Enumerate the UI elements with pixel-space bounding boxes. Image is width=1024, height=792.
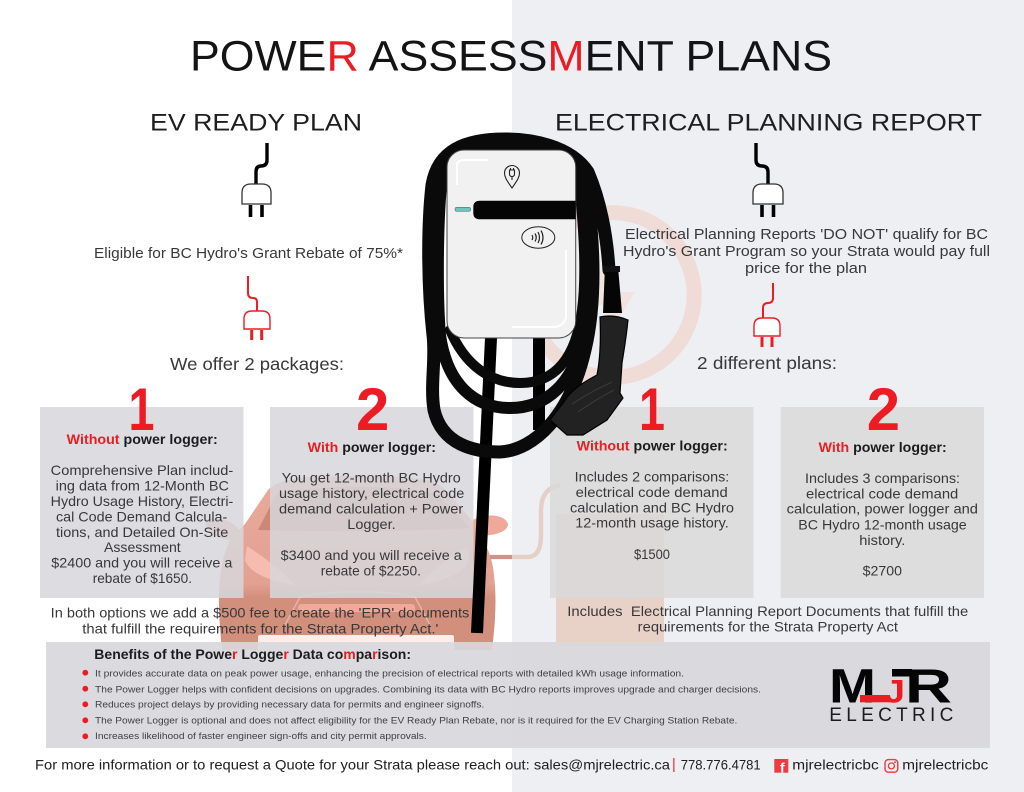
footer contact line: For more information or to request a Quote for your Strata please reach out: sales@mjrelectric.ca — [35, 756, 670, 772]
plan description — [787, 470, 978, 579]
package description: Assessment — [104, 539, 181, 555]
package description: ing data from 12-Month BC — [56, 478, 229, 494]
footer contact line: mjrelectricbc — [792, 756, 879, 772]
icon: black plug right — [753, 143, 783, 217]
logo: MJR Electric: M — [829, 660, 876, 713]
plan description: electrical code demand — [576, 484, 728, 500]
icon: location plug pin — [504, 166, 520, 188]
numeral 1: 1 — [128, 376, 154, 443]
coiled black cable — [429, 139, 609, 452]
numeral 2: 2 — [867, 376, 900, 443]
text: 2 different plans: 2 different plans: — [697, 353, 837, 373]
plan description: Includes 3 comparisons: — [805, 470, 960, 486]
decorative faded charge ring — [529, 212, 694, 378]
package description — [51, 462, 234, 586]
plan description: electrical code demand — [806, 485, 958, 501]
connector handle — [550, 266, 628, 435]
illustration: EV charger with coiled cable — [429, 139, 628, 633]
panel: Electrical report plan 2 — [781, 376, 984, 598]
icon: red plug left — [244, 276, 270, 340]
plan description: $2700 — [863, 563, 902, 579]
note: EPR fee: In both options we add a $500 fee to create the 'EPR' documents — [51, 605, 469, 621]
icon: Facebook: f — [780, 760, 785, 776]
benefits list: It provides accurate data on peak power usage, enhancing the precision of electrical reports with detailed kWh usage information. — [95, 669, 684, 680]
package description: cal Code Demand Calcula- — [56, 508, 228, 524]
note: EPR fee: that fulfill the requirements for the Strata Property Act.' — [82, 620, 438, 636]
plan description: calculation, power logger and — [787, 501, 978, 517]
text: electrical report grant note: price for the plan — [745, 261, 867, 277]
package description: $2400 and you will receive a — [51, 555, 233, 571]
plan description: history. — [859, 532, 905, 548]
text: EV plan rebate eligibility: Eligible for BC Hydro's Grant Rebate of 75%* — [94, 246, 403, 262]
note: planning report documents — [567, 603, 969, 635]
plan heading: With power logger: — [819, 439, 947, 455]
footer contact line — [35, 756, 988, 776]
package heading: Without power logger: — [67, 431, 218, 447]
illustration: faded charging station and cable — [490, 485, 664, 646]
footer contact line: mjrelectricbc — [902, 756, 988, 772]
numeral 2: 2 — [356, 376, 389, 443]
plan description — [570, 469, 734, 562]
panel: Electrical report plan 1 — [550, 376, 754, 598]
plan description: 12-month usage history. — [575, 515, 729, 531]
note: planning report documents: Includes Electrical Planning Report Documents that fulfill the — [567, 603, 969, 619]
benefits list: Increases likelihood of faster engineer sign-offs and city permit approvals. — [95, 731, 427, 742]
icon: red plug right — [754, 283, 780, 347]
icon: black plug left — [242, 143, 271, 217]
package description: rebate of $2250. — [321, 562, 421, 578]
text: we offer 2 packages: We offer 2 packages: — [170, 354, 344, 374]
package description: Comprehensive Plan includ- — [51, 462, 234, 478]
package heading: With power logger: — [308, 439, 436, 455]
panel: EV Ready package 2 — [270, 376, 474, 598]
package description: Hydro Usage History, Electri- — [51, 493, 234, 509]
plan description: Includes 2 comparisons: — [575, 469, 729, 485]
package description: You get 12-month BC Hydro — [282, 469, 461, 485]
charger body — [447, 150, 576, 338]
title: POWER ASSESSMENT PLANS — [190, 33, 832, 81]
logo: MJR Electric: R — [905, 660, 952, 713]
benefits list: The Power Logger helps with confident decisions on upgrades. Combining its data with BC Hydro reports improves upgrade and charger decisions. — [95, 684, 761, 695]
package description: demand calculation + Power — [279, 500, 464, 516]
heading: EV Ready Plan: EV READY PLAN — [150, 110, 362, 137]
icon: Instagram — [885, 760, 898, 772]
logo: MJR Electric — [829, 660, 953, 726]
numeral 1: 1 — [639, 376, 665, 443]
panel: EV Ready package 1 — [40, 376, 244, 598]
plan heading: Without power logger: — [577, 438, 728, 454]
package description — [279, 469, 465, 578]
text: electrical report grant note: Electrical Planning Reports 'DO NOT' qualify for BC — [625, 227, 988, 243]
text: electrical report grant note — [623, 227, 990, 277]
text: electrical report grant note: Hydro's Grant Program so your Strata would pay full — [623, 244, 990, 260]
note: planning report documents: requirements for the Strata Property Act — [638, 619, 898, 635]
plan description: BC Hydro 12-month usage — [798, 516, 967, 532]
benefits list: The Power Logger is optional and does not affect eligibility for the EV Ready Plan Rebate, nor is it required for the EV Charging Station Rebate. — [95, 715, 737, 726]
footer contact line: 778.776.4781 — [681, 756, 761, 772]
benefits heading: Benefits of the Powe r Logger Data comparison: — [94, 647, 411, 662]
plan description: calculation and BC Hydro — [570, 499, 734, 515]
icon: contactless reader — [522, 227, 555, 248]
package description: tions, and Detailed On-Site — [56, 524, 229, 540]
panel: benefits of the power logger — [46, 642, 990, 748]
package description: $3400 and you will receive a — [281, 547, 462, 563]
package description: Logger. — [347, 516, 396, 532]
illustration: faded red car — [205, 476, 508, 651]
heading: Electrical Planning Report: ELECTRICAL PLANNING REPORT — [555, 110, 982, 137]
icon: Facebook — [774, 759, 788, 776]
charger pole and leg — [477, 338, 539, 633]
package description: rebate of $1650. — [93, 570, 192, 586]
plan description: $1500 — [634, 546, 670, 562]
benefits list — [82, 669, 761, 742]
logo: MJR Electric: J — [884, 673, 905, 709]
logo: MJR Electric: ELECTRIC — [829, 705, 953, 726]
benefits list: Reduces project delays by providing necessary data for permits and engineer signoffs. — [95, 700, 484, 711]
package description: usage history, electrical code — [279, 485, 465, 501]
note: EPR fee — [51, 605, 469, 636]
